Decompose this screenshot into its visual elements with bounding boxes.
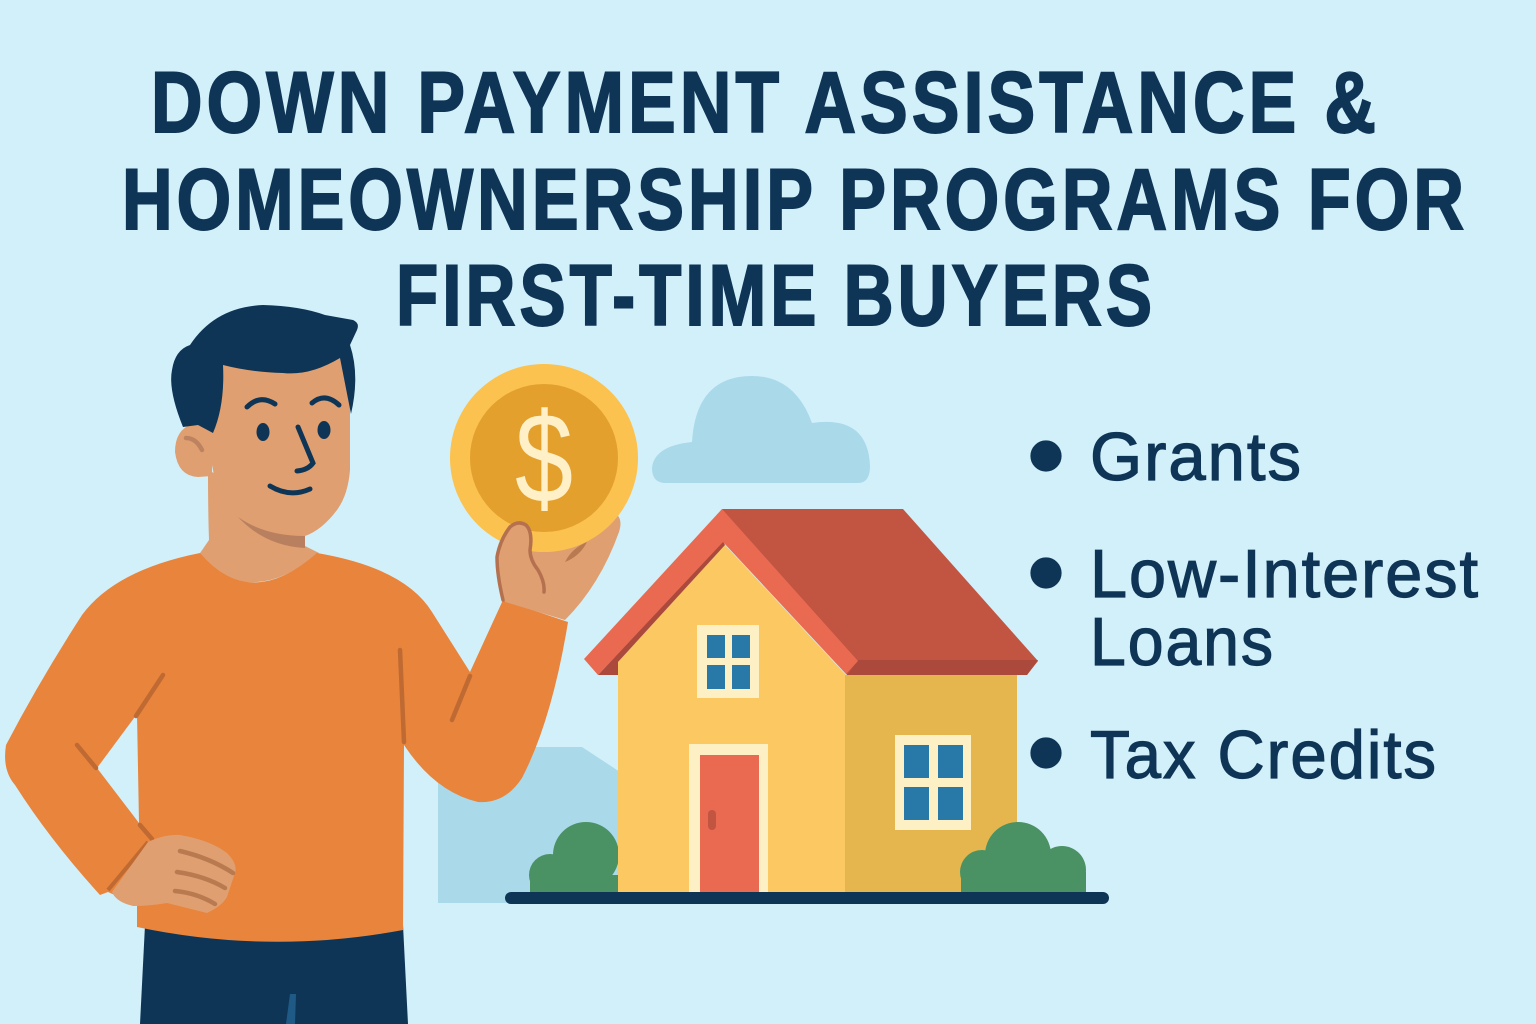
person — [5, 305, 638, 1024]
icon: house — [505, 509, 1109, 904]
gap between arm and body — [97, 714, 139, 823]
dollar sign: $ — [515, 387, 573, 530]
chin shadow — [238, 517, 305, 548]
hair — [171, 305, 358, 433]
palm behind coin — [505, 512, 620, 620]
icon: cloud — [652, 376, 870, 483]
face — [205, 345, 350, 536]
roof — [722, 509, 1038, 675]
trousers — [140, 925, 408, 1024]
title — [122, 55, 1468, 344]
right bush — [960, 822, 1086, 894]
hand on hip — [112, 835, 236, 913]
face features — [247, 398, 339, 493]
gable shadow — [598, 541, 725, 675]
bullet: low-interest loans: Low-Interest — [1090, 536, 1480, 612]
house side wall — [845, 675, 1017, 892]
house front wall — [618, 545, 846, 892]
thumb — [497, 523, 547, 612]
bullet: low-interest loans: Loans — [1090, 604, 1275, 680]
ear — [175, 424, 212, 477]
bullet: tax credits: Tax Credits — [1090, 717, 1438, 793]
roof edge — [584, 509, 858, 675]
upper window — [697, 625, 759, 698]
sweater — [5, 553, 568, 942]
sweater fold lines — [77, 650, 470, 839]
icon: background building — [438, 747, 620, 903]
door — [689, 744, 768, 892]
bullet: grants: Grants — [1090, 419, 1303, 495]
cuff line — [108, 842, 148, 890]
ground line — [505, 892, 1109, 904]
left bush — [529, 822, 625, 896]
neck — [198, 470, 319, 582]
side window — [895, 735, 971, 830]
roof underside — [847, 660, 1038, 675]
head — [171, 305, 358, 548]
title: FIRST-TIME BUYERS — [396, 248, 1156, 344]
bullet list — [1031, 419, 1480, 793]
coin — [450, 364, 638, 552]
bullet: low-interest loans — [1031, 536, 1480, 680]
